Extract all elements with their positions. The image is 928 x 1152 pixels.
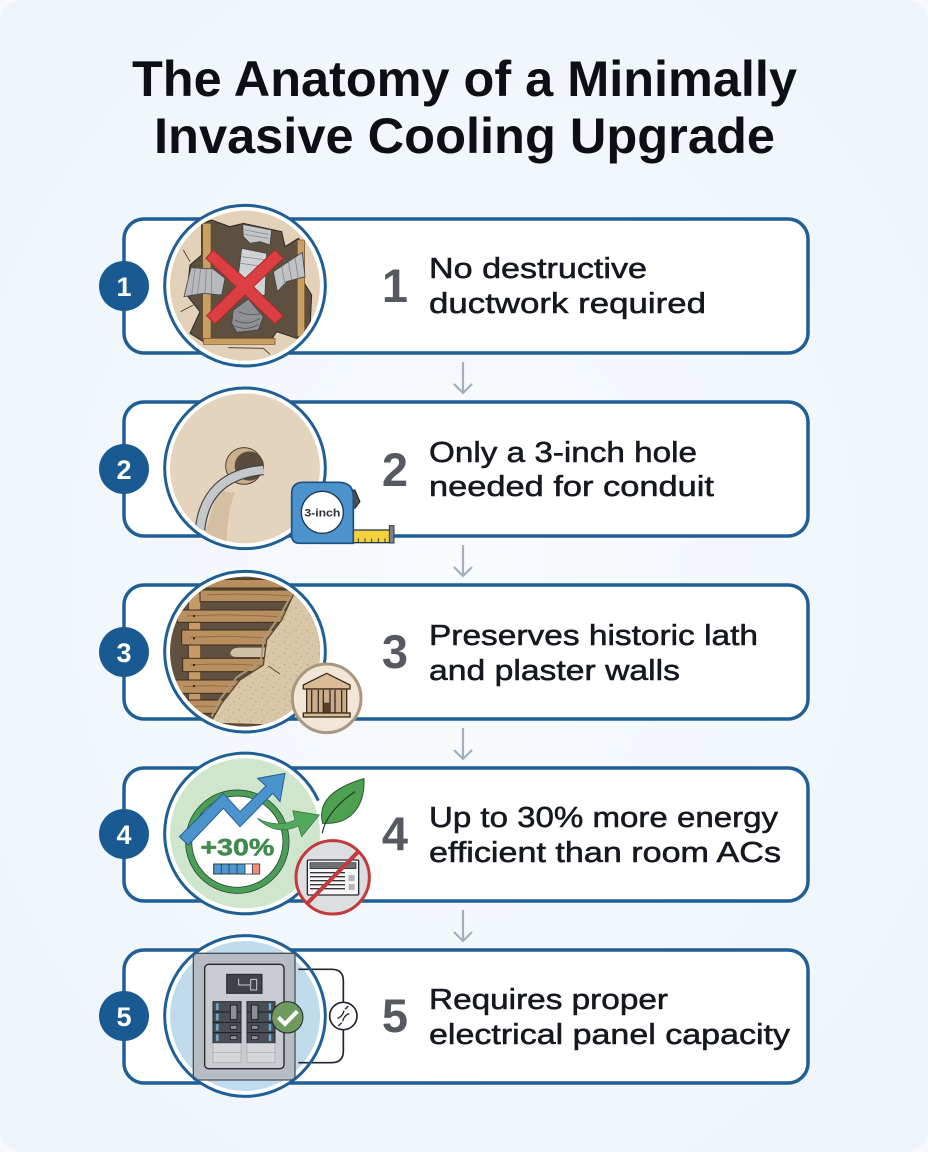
panel: step 5: [99, 936, 808, 1096]
step 3 badge: 3: [116, 638, 132, 668]
title: Invasive Cooling Upgrade: [154, 108, 775, 164]
step 1 number: 1: [382, 259, 408, 312]
step 5 badge: 5: [116, 1002, 132, 1032]
icon: energy efficiency gauge: [165, 753, 369, 914]
title: The Anatomy of a Minimally: [132, 51, 797, 107]
step 2 number: 2: [382, 443, 408, 496]
panel: step 2: [99, 388, 808, 549]
step 5 text: [429, 984, 791, 1051]
step 2 text: needed for conduit: [429, 471, 714, 503]
step 5 text: Requires proper: [429, 984, 668, 1016]
step 1 badge: [99, 261, 149, 311]
step 3 text: Preserves historic lath: [429, 620, 758, 652]
step 3 number: 3: [382, 625, 408, 678]
icon: historic building badge: [292, 664, 361, 733]
step 4 card: [124, 768, 808, 901]
step 3 text: and plaster walls: [429, 655, 680, 687]
step 3 badge: [99, 627, 149, 677]
step 1 badge: 1: [116, 272, 132, 302]
step 4 text: efficient than room ACs: [429, 837, 781, 869]
step 1 card: [124, 219, 808, 353]
arrow 4 to 5: [454, 910, 472, 941]
step 1 text: No destructive: [429, 253, 647, 285]
step 5 badge: [99, 991, 149, 1041]
step 4 badge: 4: [116, 820, 132, 850]
step 4 text: [429, 802, 781, 869]
step 2 badge: 2: [116, 455, 132, 485]
icon: electrical panel: [165, 936, 357, 1096]
step 5 number: 5: [382, 989, 408, 1042]
title: [132, 51, 797, 164]
step 4 number: 4: [382, 807, 408, 860]
step 2 text: Only a 3-inch hole: [429, 437, 697, 469]
icon: tape measure: 3-inch: [304, 507, 341, 519]
step 2 badge: [99, 444, 149, 494]
icon: energy efficiency gauge: +30%: [200, 834, 274, 861]
step 4 badge: [99, 809, 149, 859]
step 3 card: [124, 585, 808, 719]
panel: step 3: [99, 571, 808, 733]
step 2 text: [429, 437, 714, 503]
icon: tape measure: [292, 482, 394, 543]
step 5 card: [124, 950, 808, 1083]
step 3 text: [429, 620, 758, 687]
step 4 text: Up to 30% more energy: [429, 802, 779, 834]
icon: exposed lath and plaster: [165, 571, 330, 732]
panel: step 1: [99, 205, 808, 366]
icon: conduit through a small hole: [165, 388, 325, 549]
arrow 2 to 3: [454, 545, 472, 576]
arrow 3 to 4: [454, 728, 472, 759]
step 1 text: ductwork required: [429, 288, 706, 320]
arrow 1 to 2: [454, 362, 472, 393]
icon: torn wall with ducts crossed out: [165, 205, 325, 366]
step 1 text: [429, 253, 706, 320]
step 2 card: [124, 402, 808, 536]
step 5 text: electrical panel capacity: [429, 1019, 791, 1051]
panel: step 4: [99, 753, 808, 914]
